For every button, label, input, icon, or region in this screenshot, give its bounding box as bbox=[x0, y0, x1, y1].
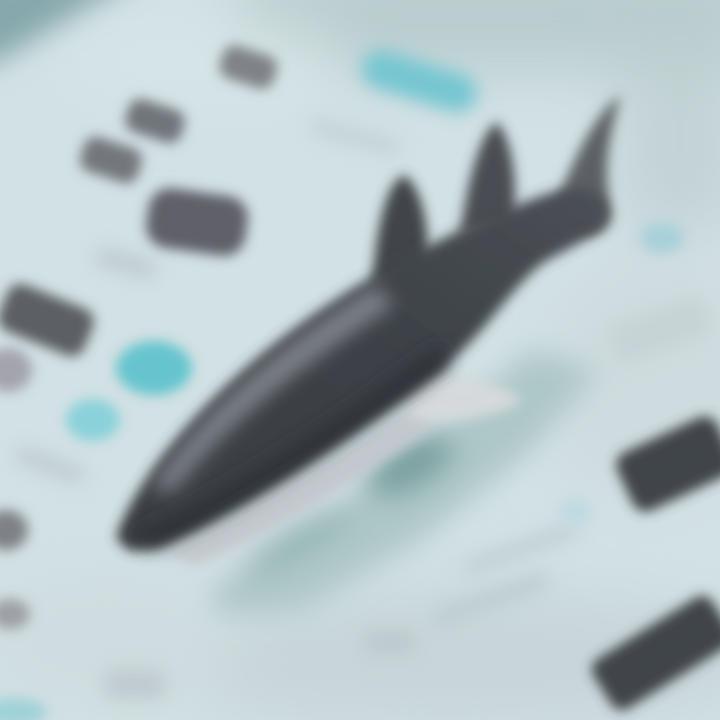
shark body bbox=[116, 189, 607, 551]
dark teal corner bbox=[0, 0, 150, 70]
dark panels right bbox=[587, 412, 720, 715]
faint text lines bbox=[15, 117, 714, 698]
upper flank highlight bbox=[150, 285, 395, 490]
dorsal fin 1 bbox=[372, 175, 428, 285]
pectoral fin bbox=[405, 380, 522, 419]
shark cast shadow bbox=[210, 350, 600, 615]
dark belly shade bbox=[135, 345, 450, 550]
teal pill top bbox=[357, 46, 481, 116]
shark belly bbox=[165, 405, 435, 565]
shark bbox=[116, 95, 620, 565]
dark chips left column bbox=[0, 42, 280, 629]
dorsal fin 2 bbox=[460, 122, 515, 235]
tail fin bbox=[555, 95, 620, 235]
teal circles bbox=[0, 223, 684, 720]
